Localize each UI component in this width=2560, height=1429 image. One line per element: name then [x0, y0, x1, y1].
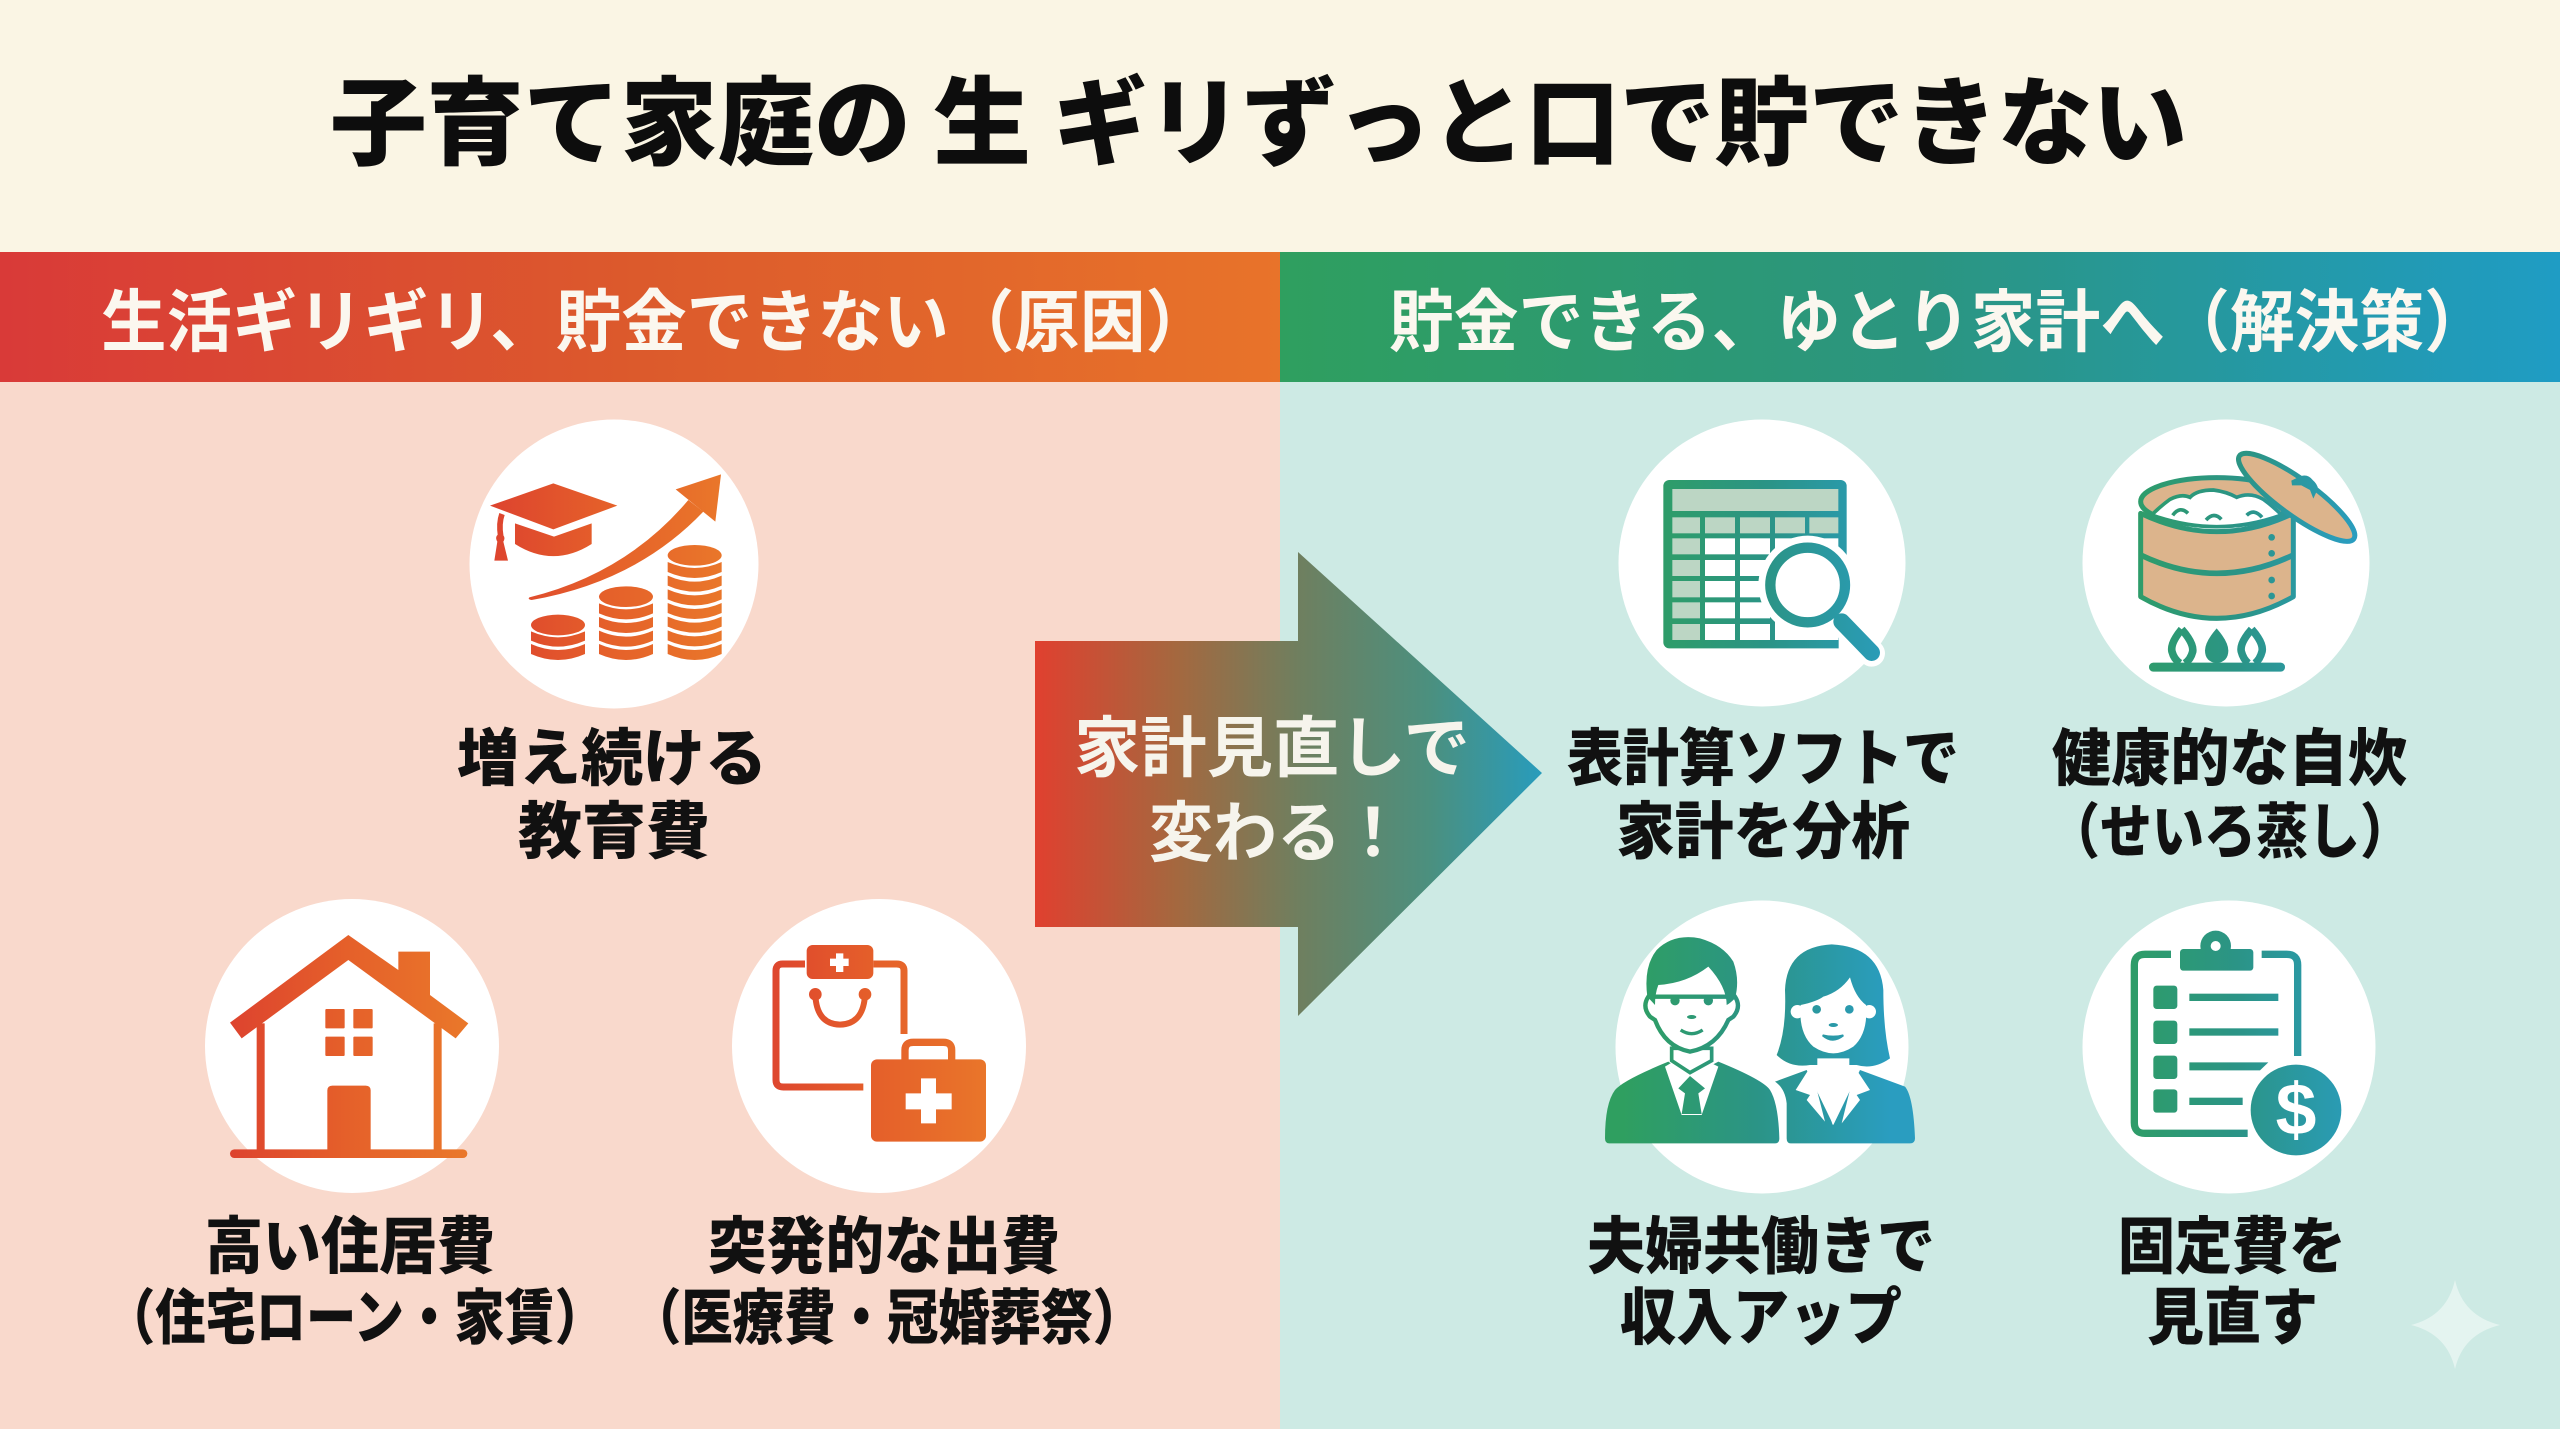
icon: spreadsheet and magnifier [1618, 420, 1906, 706]
label: fixed costs [2118, 1213, 2346, 1353]
label: spreadsheet analysis [1567, 725, 1959, 867]
icon: clipboard and dollar coin [2082, 900, 2376, 1194]
arrow: household review changes things: ！ [1340, 796, 1406, 870]
label: fixed costs: 固定費を [2118, 1213, 2346, 1282]
label: education cost [457, 725, 767, 867]
title: ギリずっと口で貯できない [1053, 71, 2187, 178]
label: housing cost: 高い住居費 [205, 1213, 495, 1282]
panel: solutions background [1280, 382, 2560, 1429]
item: fixed costs [2082, 900, 2376, 1353]
label: dual income: 収入アップ [1620, 1284, 1902, 1353]
header: solutions [1280, 252, 2560, 382]
label: home cooking [2048, 725, 2412, 866]
icon: clipboard and dollar coin: $ [2276, 1068, 2316, 1150]
title: 生 [933, 71, 1031, 178]
label: sudden expenses: （医療費・冠婚葬祭） [630, 1285, 1144, 1352]
arrow: household review changes things: 家計見直しで [1074, 711, 1470, 785]
label: housing cost: （住宅ローン・家賃） [105, 1285, 605, 1352]
arrow: household review changes things [1035, 552, 1542, 1016]
item: dual income [1587, 900, 1935, 1353]
panel: causes background [0, 382, 1280, 1429]
label: education cost: 増え続ける [457, 725, 767, 794]
label: housing cost [105, 1213, 605, 1352]
item: education cost [457, 420, 767, 867]
label: home cooking: 健康的な自炊 [2052, 725, 2407, 794]
header: causes [0, 252, 1280, 382]
label: education cost: 教育費 [518, 798, 710, 867]
item: sudden expenses [630, 899, 1144, 1352]
icon: graduation cap and coins [470, 420, 758, 708]
item: home cooking [2048, 420, 2412, 866]
label: dual income: 夫婦共働きで [1587, 1213, 1935, 1282]
label: dual income [1587, 1213, 1935, 1353]
title: 子育て家庭の [330, 71, 911, 178]
background: title band [0, 0, 2560, 252]
label: spreadsheet analysis: 家計を分析 [1616, 798, 1910, 867]
label: sudden expenses: 突発的な出費 [708, 1213, 1060, 1282]
item: spreadsheet analysis [1567, 420, 1959, 867]
arrow: household review changes things: 変わる [1149, 796, 1341, 870]
icon: sparkle watermark [2411, 1280, 2500, 1369]
label: fixed costs: 見直す [2147, 1284, 2318, 1353]
item: housing cost [105, 899, 605, 1352]
icon: bamboo steamer [2082, 420, 2370, 706]
title [330, 71, 2187, 178]
label: spreadsheet analysis: 表計算ソフトで [1567, 725, 1959, 794]
header: solutions: 貯金できる、ゆとり家計へ（解決策） [1389, 285, 2489, 361]
label: sudden expenses [630, 1213, 1144, 1352]
icon: couple [1605, 900, 1915, 1194]
label: home cooking: （せいろ蒸し） [2048, 799, 2412, 866]
header: causes: 生活ギリギリ、貯金できない（原因） [101, 285, 1211, 361]
icon: medical bag and first aid kit [732, 899, 1026, 1193]
icon: house [205, 899, 499, 1193]
